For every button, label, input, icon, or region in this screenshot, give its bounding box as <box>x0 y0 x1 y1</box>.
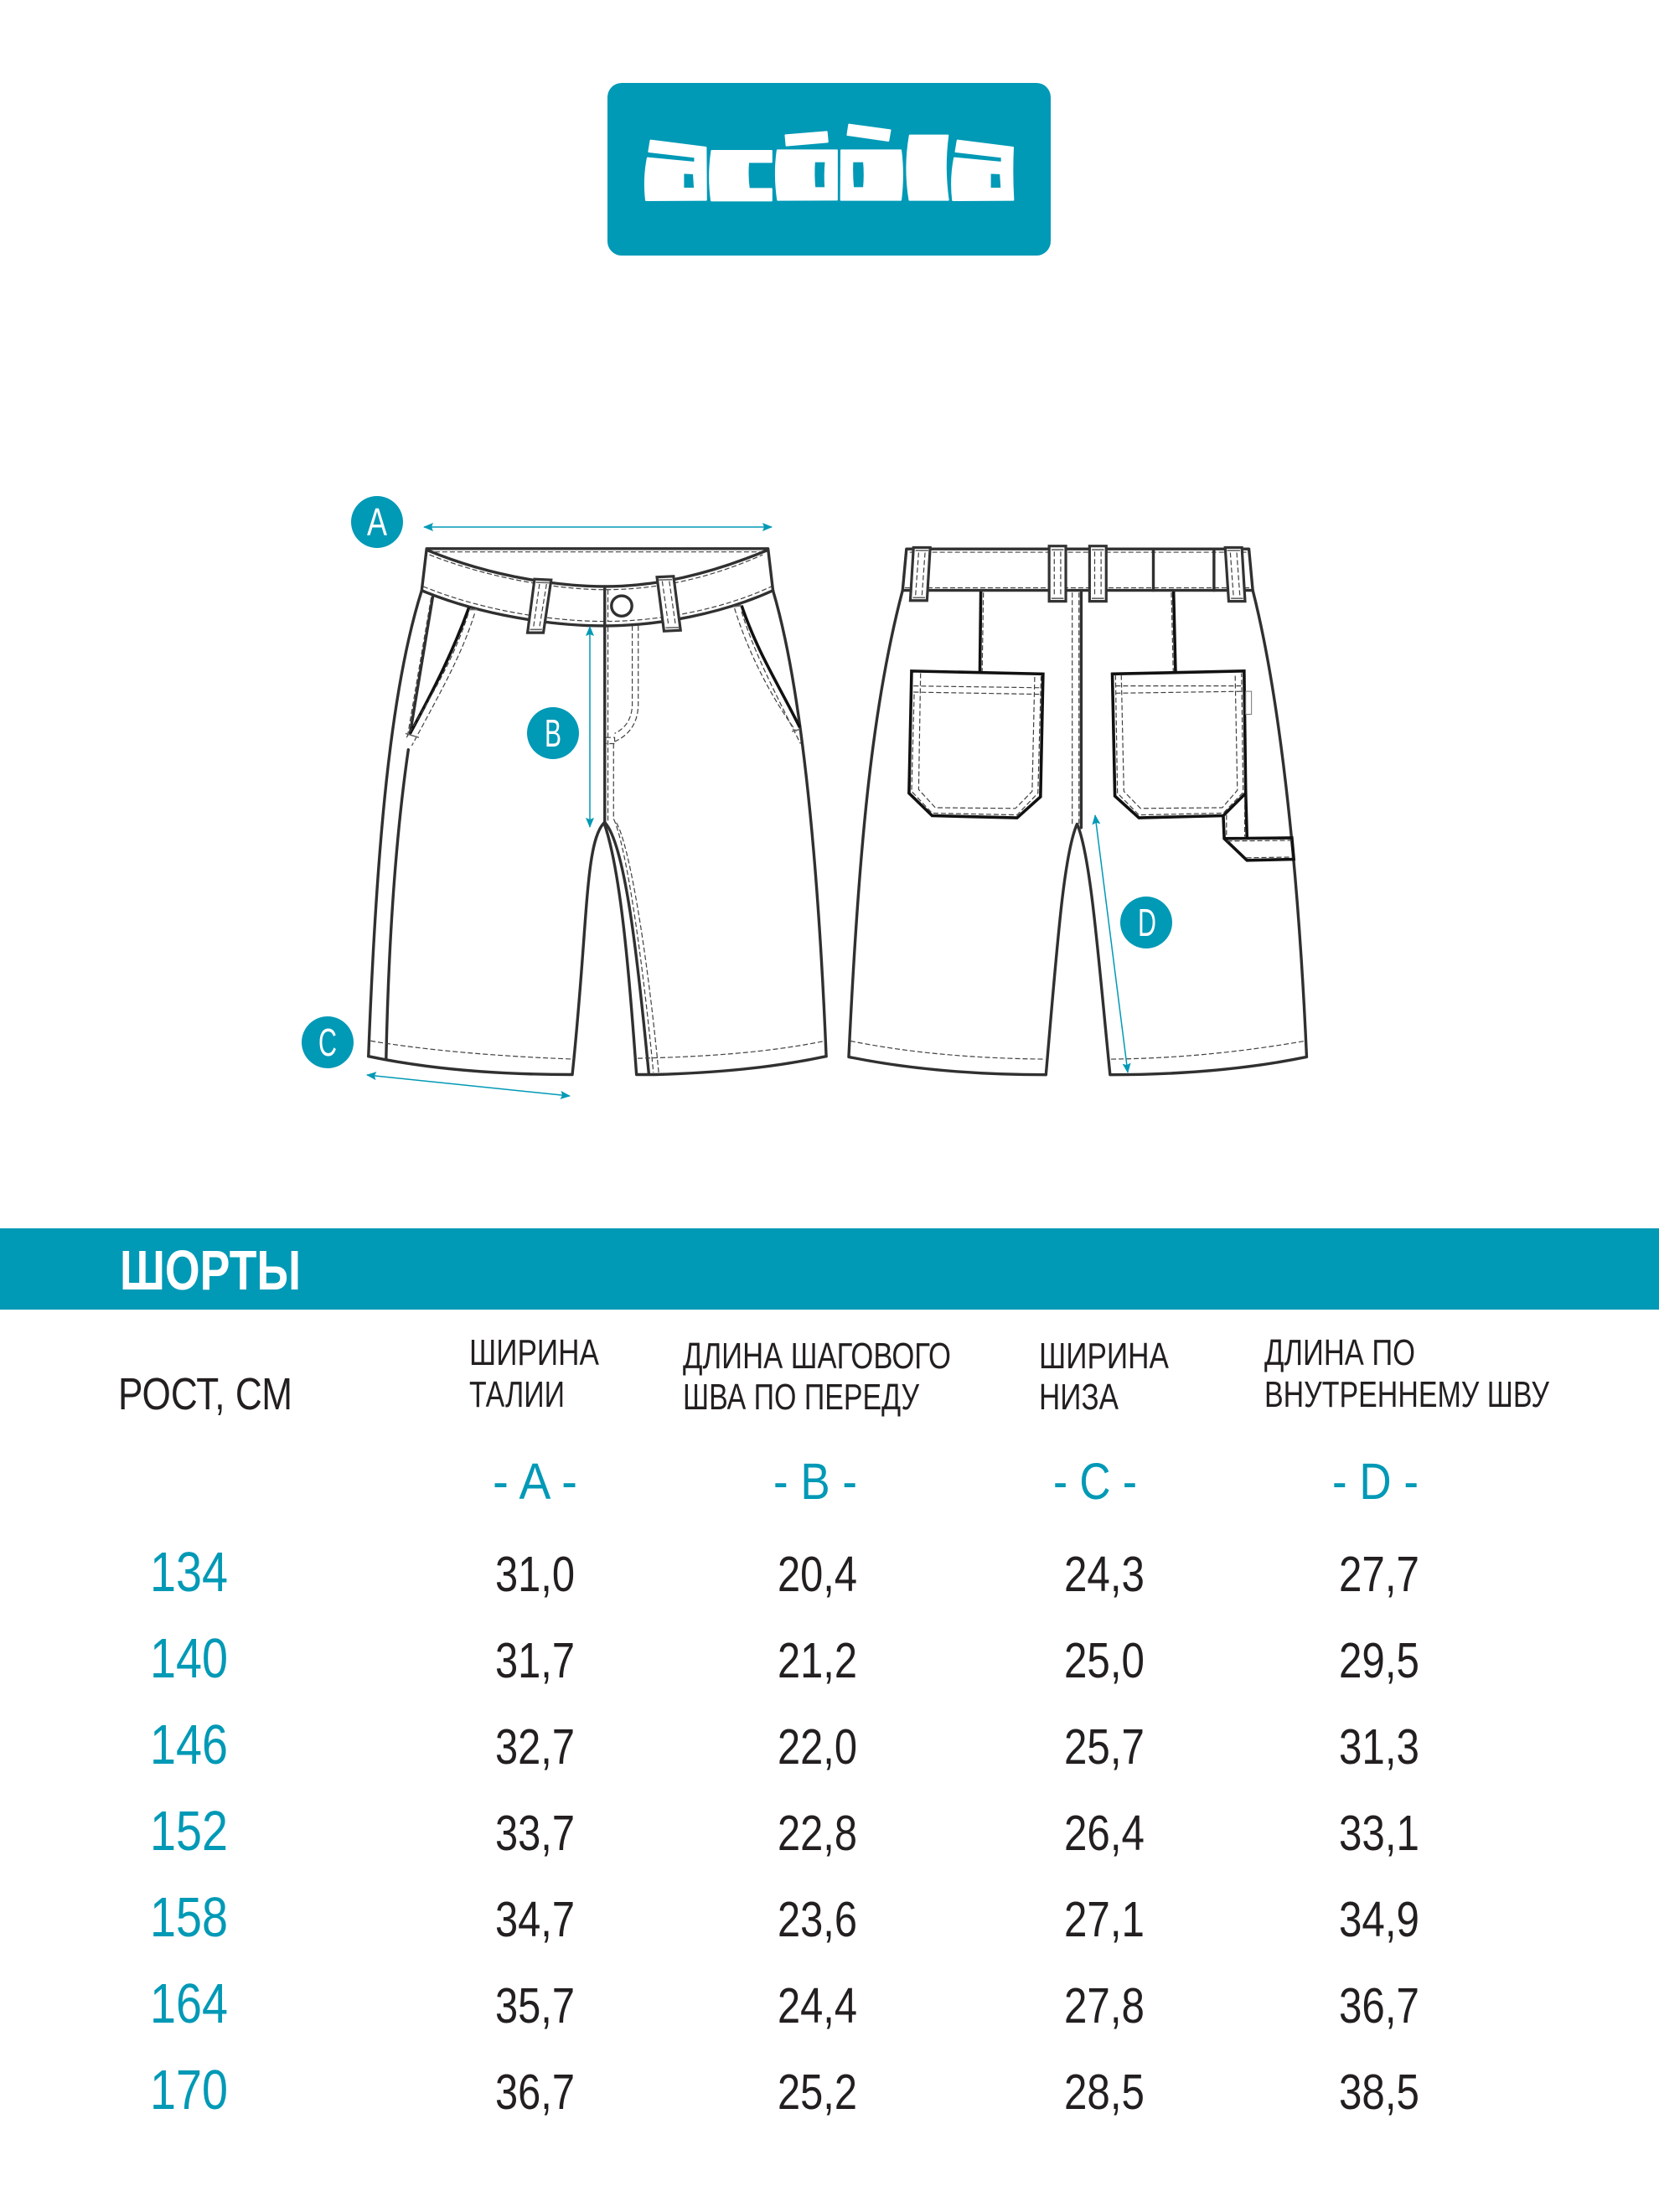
badge C: C <box>318 1021 337 1064</box>
row 140 <box>150 1627 1419 1690</box>
column letters: - C - <box>1053 1453 1137 1510</box>
row 170 <box>150 2059 1419 2122</box>
badge A <box>351 496 403 548</box>
row 158 <box>150 1886 1419 1949</box>
column letters: - A - <box>493 1453 577 1510</box>
header: hem width: ШИРИНА <box>1039 1336 1169 1377</box>
row 158: 34,9 <box>1339 1892 1419 1947</box>
front belt loops <box>528 576 680 633</box>
back belt loops <box>910 546 1245 602</box>
row 170: 38,5 <box>1339 2065 1419 2120</box>
header: hem width: НИЗА <box>1039 1377 1119 1418</box>
table headers <box>118 1333 1549 1419</box>
button <box>612 596 632 616</box>
header: front rise <box>683 1336 951 1418</box>
side patch pocket <box>1223 793 1294 861</box>
header: inseam: ДЛИНА ПО <box>1264 1333 1415 1373</box>
row 164: 27,8 <box>1064 1978 1145 2034</box>
column letters: - D - <box>1332 1453 1419 1510</box>
header: inseam <box>1264 1333 1549 1415</box>
row 164: 24,4 <box>778 1978 857 2034</box>
header: inseam: ВНУТРЕННЕМУ ШВУ <box>1264 1375 1549 1415</box>
row 164 <box>150 1972 1419 2035</box>
row 134: 31,0 <box>495 1547 575 1602</box>
row 140: 29,5 <box>1339 1633 1419 1688</box>
header: waist width <box>469 1333 599 1415</box>
row 134: 27,7 <box>1339 1547 1419 1602</box>
row 164: 35,7 <box>495 1978 575 2034</box>
row 152 <box>150 1800 1419 1863</box>
row 170: 25,2 <box>778 2065 857 2120</box>
row 164: 36,7 <box>1339 1978 1419 2034</box>
row 140: 21,2 <box>778 1633 857 1688</box>
row 164: 164 <box>150 1972 228 2035</box>
row 146 <box>150 1713 1419 1776</box>
arrow D: inseam <box>1095 815 1128 1072</box>
badge B: B <box>545 711 561 755</box>
row 146: 25,7 <box>1064 1719 1145 1775</box>
row 152: 22,8 <box>778 1806 857 1861</box>
front view of shorts <box>369 549 826 1075</box>
row 140: 140 <box>150 1627 228 1690</box>
row 158: 23,6 <box>778 1892 857 1947</box>
back view of shorts <box>849 546 1306 1075</box>
front pockets <box>406 597 800 746</box>
row 146: 32,7 <box>495 1719 575 1775</box>
left back pocket <box>909 671 1043 818</box>
row 140: 25,0 <box>1064 1633 1145 1688</box>
header: hem width <box>1039 1336 1169 1418</box>
title bar <box>0 1228 1659 1310</box>
arrow A: waist width <box>424 526 772 528</box>
badge D <box>1120 897 1172 948</box>
row 134: 20,4 <box>778 1547 857 1602</box>
row 152: 26,4 <box>1064 1806 1145 1861</box>
header: front rise: ДЛИНА ШАГОВОГО <box>683 1336 951 1377</box>
row 152: 152 <box>150 1800 228 1863</box>
header: front rise: ШВА ПО ПЕРЕДУ <box>683 1377 919 1418</box>
row 134 <box>150 1541 1419 1604</box>
row 134: 24,3 <box>1064 1547 1145 1602</box>
badge A: A <box>367 500 387 544</box>
logo <box>607 83 1051 256</box>
row 146: 31,3 <box>1339 1719 1419 1775</box>
row 134: 134 <box>150 1541 228 1604</box>
side tag <box>1246 691 1252 714</box>
row 140: 31,7 <box>495 1633 575 1688</box>
row 158: 27,1 <box>1064 1892 1145 1947</box>
row 158: 34,7 <box>495 1892 575 1947</box>
row 152: 33,7 <box>495 1806 575 1861</box>
row 170: 170 <box>150 2059 228 2122</box>
badge C <box>302 1016 354 1068</box>
arrow C: hem width <box>367 1075 570 1096</box>
row 170: 36,7 <box>495 2065 575 2120</box>
header: waist width: ТАЛИИ <box>469 1375 565 1415</box>
column letters <box>493 1453 1419 1510</box>
row 158: 158 <box>150 1886 228 1949</box>
row 146: 22,0 <box>778 1719 857 1775</box>
arrow B: front rise <box>589 627 591 827</box>
badge B <box>527 707 579 759</box>
header: waist width: ШИРИНА <box>469 1333 599 1373</box>
right back pocket <box>1113 671 1246 818</box>
title bar: ШОРТЫ <box>120 1239 301 1302</box>
column letters: - B - <box>773 1453 857 1510</box>
header: height: РОСТ, СМ <box>118 1369 292 1419</box>
badge D: D <box>1138 901 1156 944</box>
row 152: 33,1 <box>1339 1806 1419 1861</box>
row 170: 28,5 <box>1064 2065 1145 2120</box>
row 146: 146 <box>150 1713 228 1776</box>
